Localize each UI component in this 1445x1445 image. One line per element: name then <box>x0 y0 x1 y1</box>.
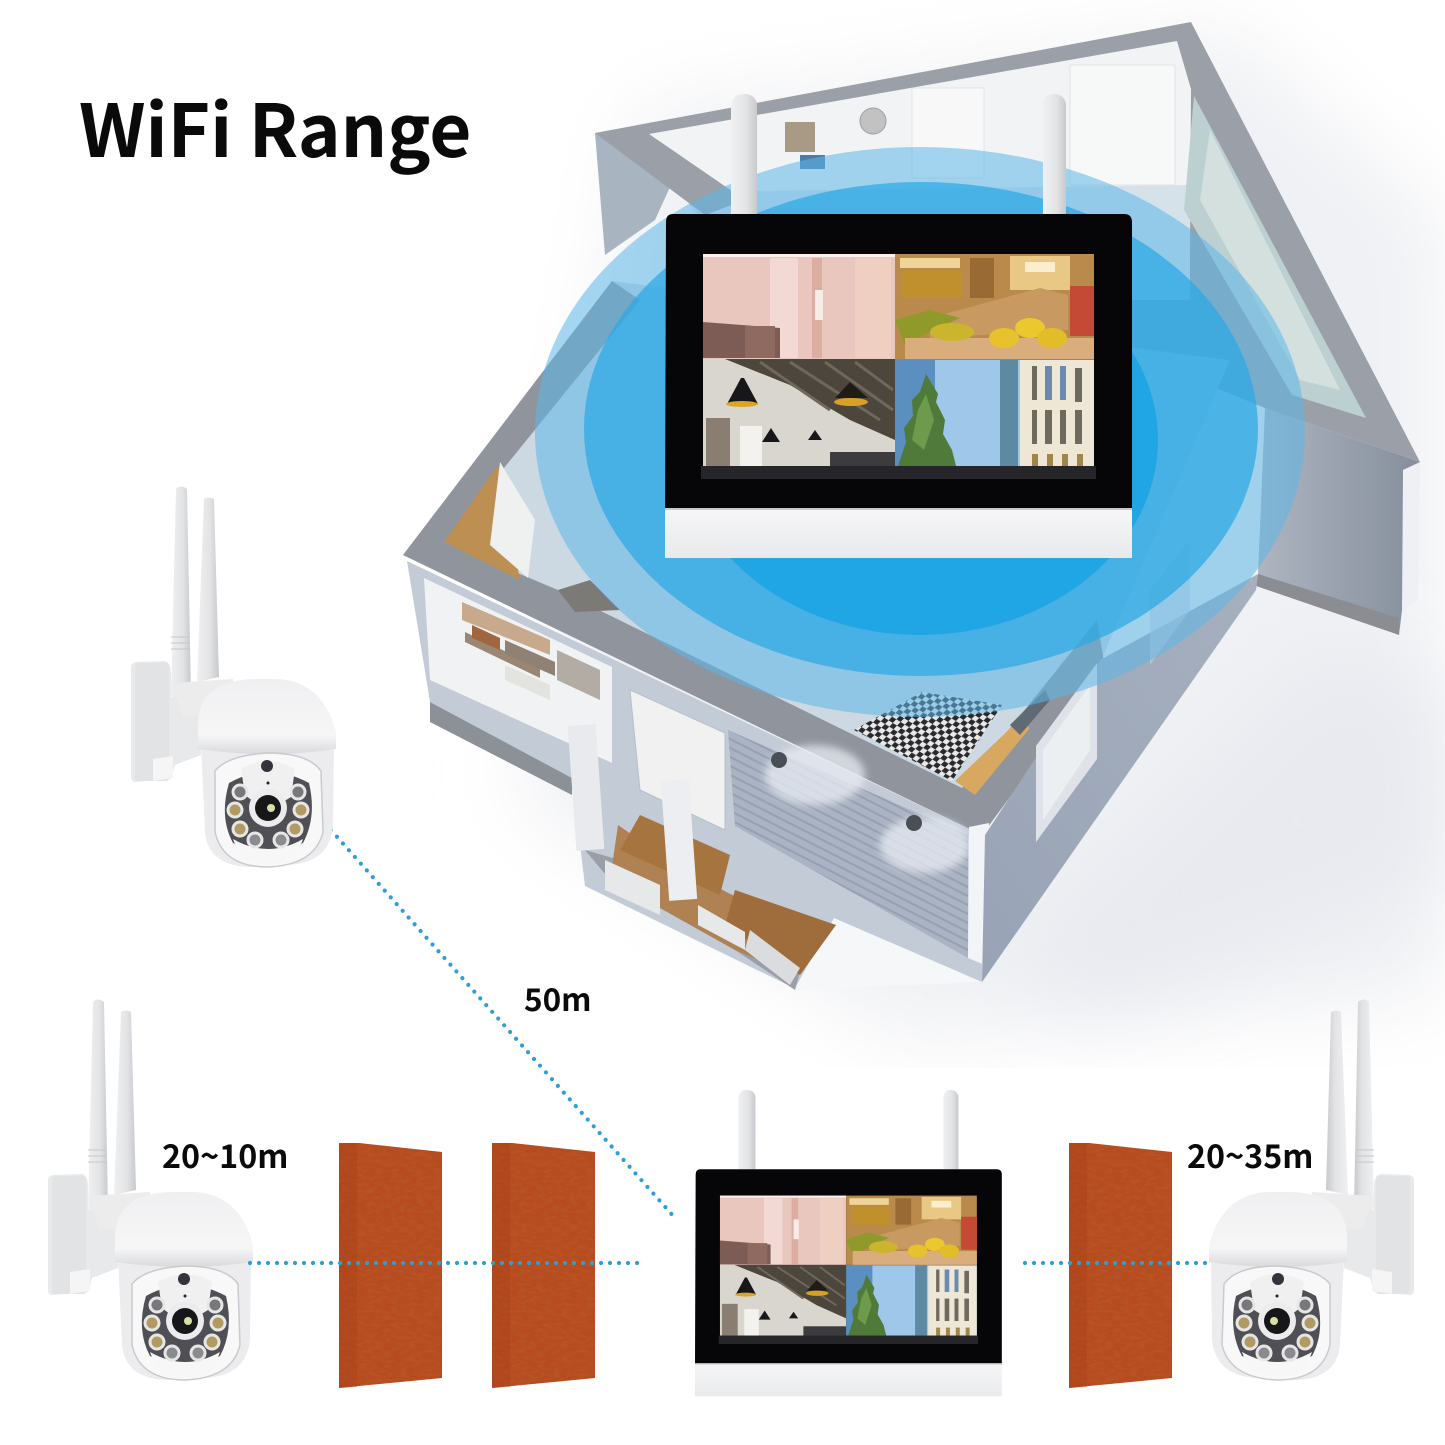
dotted link: top camera to monitor <box>331 830 675 1218</box>
label: 20~10m: 20~10m <box>162 1132 288 1178</box>
label: 20~35m: 20~35m <box>1187 1132 1313 1178</box>
title: WiFi Range <box>79 73 472 178</box>
illustration: cutaway house <box>403 22 1420 990</box>
side wall <box>982 574 1258 982</box>
brick wall 2 <box>492 1143 595 1388</box>
roof bands <box>403 281 1105 835</box>
camera: bottom left <box>48 1000 253 1380</box>
large monitor <box>665 94 1132 558</box>
brick wall 1 <box>339 1143 442 1388</box>
wifi signal rings <box>535 147 1305 717</box>
soft ground shadow <box>520 30 1445 1040</box>
shop window <box>462 602 600 700</box>
back wall items <box>912 88 984 178</box>
front wall left <box>407 561 982 988</box>
inner ring <box>682 245 1158 635</box>
siding <box>728 730 968 958</box>
checker floor <box>854 692 1002 781</box>
upper wing <box>595 22 1420 462</box>
outer ring <box>535 147 1305 717</box>
white ground lower front <box>794 918 982 990</box>
main house floor <box>403 281 1230 823</box>
door <box>630 690 725 830</box>
dotted link: left camera to monitor <box>250 1261 646 1265</box>
brick wall 3 <box>1069 1143 1172 1388</box>
corner strip <box>968 823 989 965</box>
middle ring <box>584 182 1258 676</box>
camera: top left <box>131 486 336 867</box>
corner room floor <box>444 465 520 580</box>
camera: bottom right <box>1209 1000 1414 1380</box>
wall lamps <box>771 752 787 768</box>
right exterior wall <box>1258 408 1420 635</box>
porch <box>568 724 836 990</box>
label: 50m: 50m <box>524 975 592 1021</box>
dotted link: monitor to right camera <box>1025 1261 1212 1265</box>
small monitor <box>695 1090 1002 1396</box>
